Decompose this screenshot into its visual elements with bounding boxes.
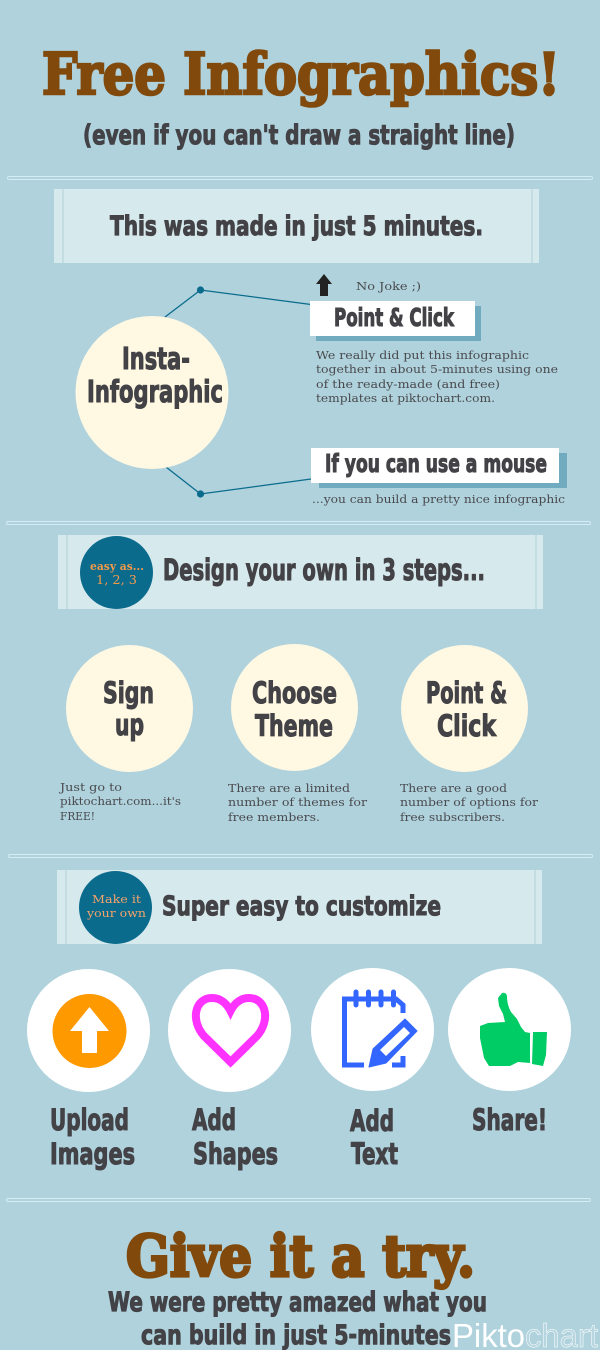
label: upload images: Images [50, 1137, 135, 1171]
connector lines and dots [165, 286, 311, 498]
circle: Insta-Infographic: Insta- [122, 342, 190, 377]
step 1: sign up [66, 645, 193, 772]
closing text [108, 1287, 487, 1350]
text block: point and click description: together in about 5-minutes using one [316, 362, 558, 376]
banner: made in 5 minutes: This was made in just 5 minutes. [110, 211, 483, 242]
step 3: point and click: Click [437, 709, 497, 743]
badge: easy as 1, 2, 3: 1, 2, 3 [96, 573, 137, 587]
text block: step 1 description [59, 780, 181, 823]
step 2: choose theme: Theme [255, 709, 333, 743]
icon: up arrow [316, 274, 332, 296]
icon: notepad and pencil [311, 968, 434, 1091]
text block: step 3 description: number of options for [400, 795, 539, 809]
step 3: point and click: Point & [426, 676, 507, 710]
text block: step 3 description: There are a good [400, 781, 508, 795]
banner: super easy to customize [57, 870, 542, 944]
text block: step 3 description: free subscribers. [400, 810, 505, 824]
badge: easy as 1, 2, 3: easy as... [90, 560, 144, 573]
text block: step 3 description [400, 781, 539, 824]
step 3: point and click [401, 645, 528, 772]
icon: upload images [27, 969, 150, 1092]
step 1: sign up: Sign [103, 676, 154, 710]
circle: Insta-Infographic: Infographic [87, 375, 223, 410]
icon: heart shape [168, 969, 291, 1092]
label: add text: Text [351, 1137, 398, 1171]
step 2: choose theme: Choose [252, 676, 337, 710]
badge: easy as 1, 2, 3 [80, 536, 153, 609]
label: add text: Add [350, 1104, 394, 1138]
label: upload images [50, 1103, 135, 1171]
text block: step 2 description: free members. [228, 810, 320, 824]
label: point and click: Point & Click [334, 303, 455, 332]
note: no joke: No Joke ;) [356, 279, 421, 293]
text block: step 2 description: There are a limited [228, 781, 351, 795]
step 1: sign up: up [115, 708, 144, 742]
text block: point and click description: templates at piktochart.com. [316, 391, 495, 405]
text block: point and click description: We really did put this infographic [316, 348, 529, 362]
badge: make it your own [79, 871, 152, 944]
text block: step 2 description: number of themes for [228, 795, 368, 809]
text block: step 1 description: piktochart.com...it's [60, 794, 181, 808]
banner: super easy to customize: Super easy to customize [162, 891, 441, 922]
label: share: Share! [472, 1103, 547, 1137]
label: point and click [310, 301, 481, 341]
badge: make it your own: Make it [92, 892, 141, 906]
step 2: choose theme [231, 644, 358, 771]
label: add text [350, 1104, 398, 1171]
text block: step 1 description: FREE! [60, 809, 95, 823]
text block: step 1 description: Just go to [59, 780, 122, 794]
closing heading: Give it a try. [126, 1223, 475, 1290]
text block: point and click description: of the ready-made (and free) [316, 377, 500, 391]
text block: point and click description [316, 348, 558, 405]
label: upload images: Upload [50, 1103, 129, 1137]
icon: thumbs up [448, 968, 571, 1091]
text block: step 2 description [228, 781, 368, 824]
label: add shapes [192, 1103, 278, 1171]
badge: make it your own: your own [86, 906, 147, 920]
label: add shapes: Shapes [193, 1137, 278, 1171]
circle: Insta-Infographic [76, 316, 228, 469]
banner: made in 5 minutes [54, 189, 539, 263]
banner: design your own [58, 535, 543, 609]
label: add shapes: Add [192, 1103, 236, 1137]
text: mouse description: ...you can build a pretty nice infographic [312, 492, 565, 506]
label: if you can use a mouse [311, 448, 567, 488]
